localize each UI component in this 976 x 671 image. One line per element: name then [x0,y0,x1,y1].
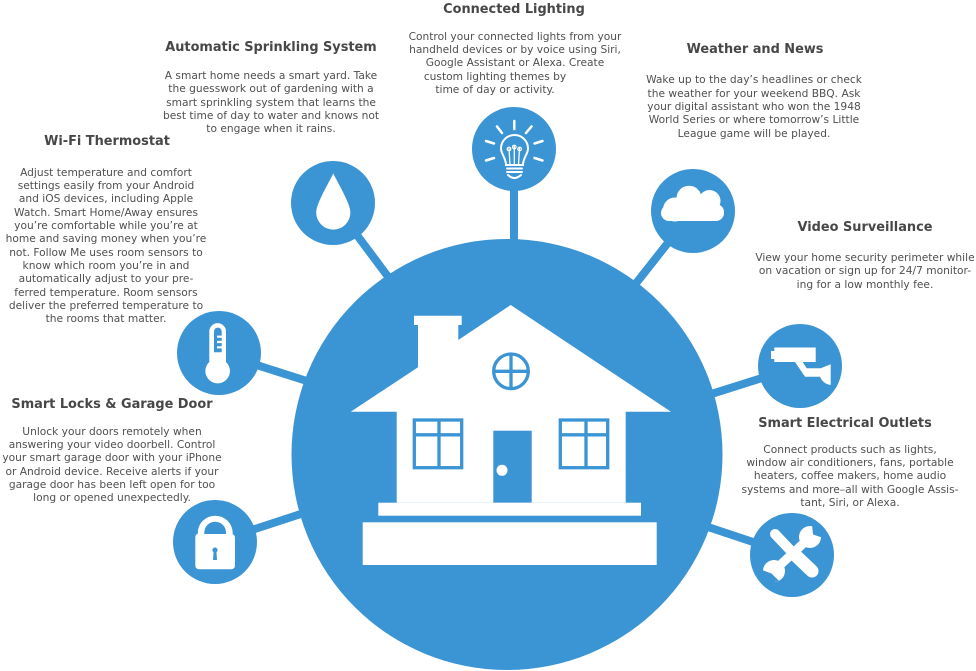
house: round window [494,354,528,389]
central circle with house [292,239,722,670]
text: Weather and News: the weather for your weekend BBQ. Ask [648,87,861,100]
text: Wi-Fi Thermostat: automatically adjust to your pre- [19,272,193,285]
house: roof and chimney [351,305,671,503]
text: Wi-Fi Thermostat: Watch. Smart Home/Away ensures [14,206,198,219]
text: Weather and News: World Series or where tomorrow’s Little [649,113,859,126]
text: Wi-Fi Thermostat: and iOS devices, including Apple [19,192,193,205]
text: Smart Locks and Garage Door: or Android device. Receive alerts if your [5,465,219,478]
text: Video Surveillance: Video Surveillance [798,220,933,235]
icon: thermometer [177,311,261,395]
text: Video Surveillance: on vacation or sign up for 24/7 monitor- [759,264,971,277]
text: Automatic Sprinkling System: best time of day to water and knows not [163,109,379,122]
text: Smart Electrical Outlets: Smart Electrical Outlets [758,416,932,431]
text: Video Surveillance: ing for a low monthly fee. [797,278,933,291]
text: Weather and News: Wake up to the day’s headlines or check [646,73,863,86]
text: Smart Locks and Garage Door: answering your video doorbell. Control [9,438,215,451]
icon: water drop [291,161,375,245]
house: foundation [363,522,657,565]
icon: security camera [758,324,842,408]
text: Wi-Fi Thermostat [6,134,206,325]
text: Smart Locks and Garage Door: garage door has been left open for too [9,478,215,491]
text: Smart Electrical Outlets [741,416,959,509]
text: Wi-Fi Thermostat: you’re comfortable while you’re at [14,219,198,232]
house: door [493,431,532,503]
house: right window [560,420,608,468]
text: Smart Locks and Garage Door [2,397,222,504]
text: Connected Lighting: time of day or activity. [435,83,555,96]
text: Video Surveillance: View your home security perimeter while [755,251,975,264]
text: Automatic Sprinkling System: A smart home needs a smart yard. Take [165,69,377,82]
text: Video Surveillance [755,220,975,291]
text: Smart Locks and Garage Door: your smart garage door with your iPhone [2,451,222,464]
text: Smart Electrical Outlets: tant, Siri, or Alexa. [800,496,900,509]
text: Connected Lighting: Connected Lighting [443,2,585,17]
text: Connected Lighting: handheld devices or by voice using Siri, [409,43,621,56]
text: Connected Lighting: Control your connected lights from your [409,30,622,43]
text: Wi-Fi Thermostat: know which room you’re in and [23,259,189,272]
text: Weather and News [646,42,863,140]
text: Automatic Sprinkling System: to engage when it rains. [206,122,336,135]
icon: wrench and screwdriver [750,513,834,597]
text: Connected Lighting: Google Assistant or Alexa. Create [426,56,604,69]
house: left window [414,420,462,468]
text: Wi-Fi Thermostat: not. Follow Me uses room sensors to [9,246,203,259]
text: Smart Electrical Outlets: systems and more–all with Google Assis- [741,483,959,496]
text: Smart Locks and Garage Door: long or opened unexpectedly. [33,491,191,504]
text: Automatic Sprinkling System: the guesswork out of gardening with a [168,82,374,95]
text: Weather and News: Weather and News [687,42,824,57]
text: Connected Lighting [409,2,622,96]
text: Wi-Fi Thermostat: home and saving money when you’re [6,232,206,245]
text: Automatic Sprinkling System: Automatic Sprinkling System [165,40,377,55]
text: Automatic Sprinkling System: smart sprinkling system that learns the [166,96,376,109]
text: Smart Locks and Garage Door: Unlock your doors remotely when [22,425,202,438]
text: Wi-Fi Thermostat: Adjust temperature and comfort [20,166,192,179]
text: Weather and News: your digital assistant who won the 1948 [647,100,861,113]
text: Connected Lighting: custom lighting themes by [424,70,566,83]
text: Wi-Fi Thermostat: the rooms that matter. [46,312,166,325]
text: Weather and News: League game will be played. [678,127,830,140]
text: Wi-Fi Thermostat: Wi-Fi Thermostat [44,134,170,149]
text: Wi-Fi Thermostat: deliver the preferred temperature to [9,299,203,312]
connector lines [215,149,800,555]
icon: cloud [651,169,735,253]
text: Smart Electrical Outlets: heaters, coffee makers, home audio [754,469,946,482]
text: Smart Electrical Outlets: window air conditioners, fans, portable [746,456,954,469]
house: porch [378,503,641,516]
icon: padlock [173,500,257,584]
text: Smart Locks and Garage Door: Smart Locks & Garage Door [11,397,213,412]
text: Wi-Fi Thermostat: ferred temperature. Room sensors [14,286,198,299]
text: Wi-Fi Thermostat: settings easily from your Android [18,179,194,192]
icon: light bulb [472,107,556,191]
text: Smart Electrical Outlets: Connect products such as lights, [763,443,937,456]
text: Automatic Sprinkling System [163,40,379,135]
